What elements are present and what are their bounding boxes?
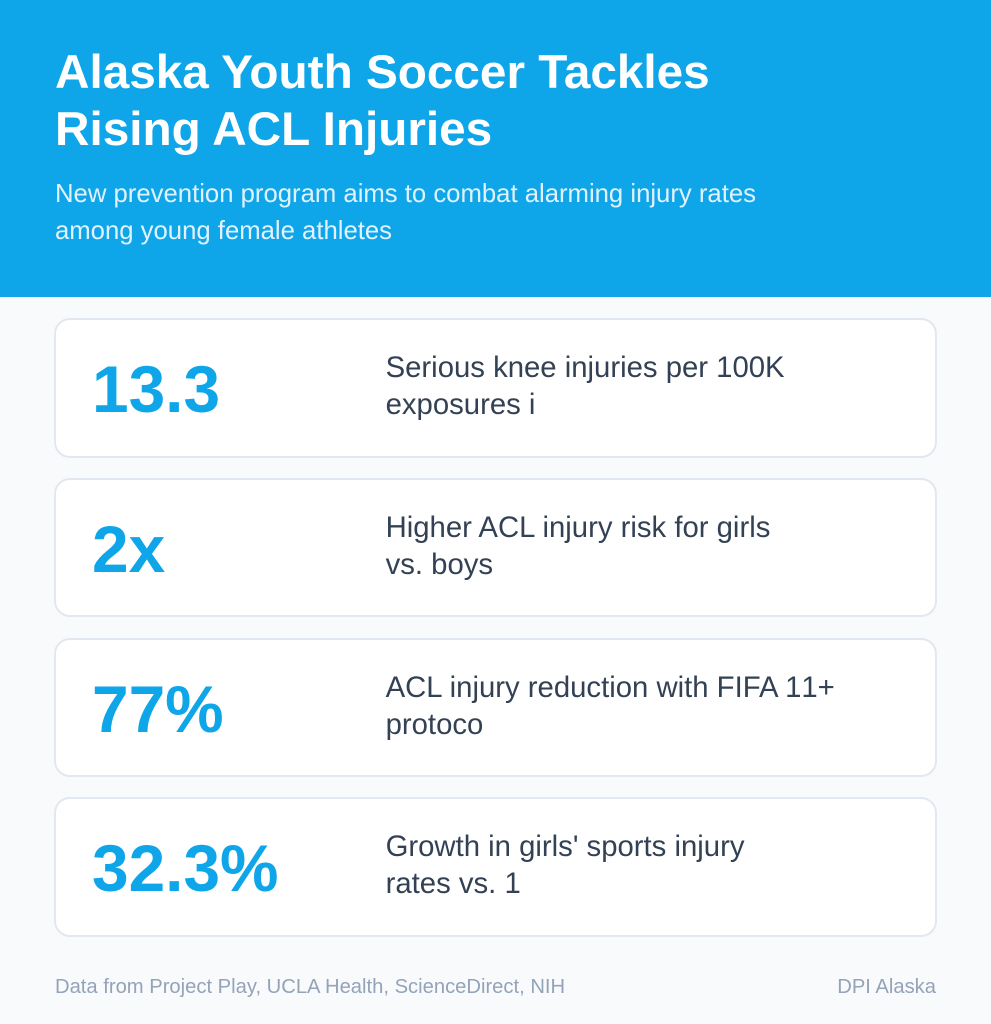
title — [55, 46, 710, 156]
footer sources: Data from Project Play, UCLA Health, ScienceDirect, NIH — [55, 976, 565, 998]
subtitle: among young female athletes — [55, 217, 392, 245]
stat description — [386, 351, 785, 421]
title: Rising ACL Injuries — [55, 103, 492, 156]
footer brand: DPI Alaska — [837, 976, 936, 998]
stat description: Growth in girls' sports injury — [386, 830, 744, 863]
stat description: vs. boys — [386, 548, 493, 581]
stat description: Serious knee injuries per 100K — [386, 351, 785, 384]
stat value: 2x — [92, 512, 165, 586]
stat value: 77% — [92, 672, 224, 746]
header banner — [0, 0, 991, 297]
subtitle — [55, 180, 756, 245]
stat value: 32.3% — [92, 831, 279, 905]
stat description: protoco — [386, 708, 483, 741]
title: Alaska Youth Soccer Tackles — [55, 46, 710, 99]
stat description — [386, 671, 835, 741]
stat description: ACL injury reduction with FIFA 11+ — [386, 671, 835, 704]
stat description: exposures i — [386, 388, 535, 421]
stat card: 13.3 — [54, 318, 937, 458]
stat value: 13.3 — [92, 352, 220, 426]
stat card: 2x — [54, 478, 937, 617]
stat card: 77% — [54, 638, 937, 777]
stat description: rates vs. 1 — [386, 867, 521, 900]
stat card: 32.3% — [54, 797, 937, 937]
stat description — [386, 830, 744, 900]
stat description — [386, 511, 770, 581]
stat description: Higher ACL injury risk for girls — [386, 511, 770, 544]
subtitle: New prevention program aims to combat alarming injury rates — [55, 180, 756, 208]
